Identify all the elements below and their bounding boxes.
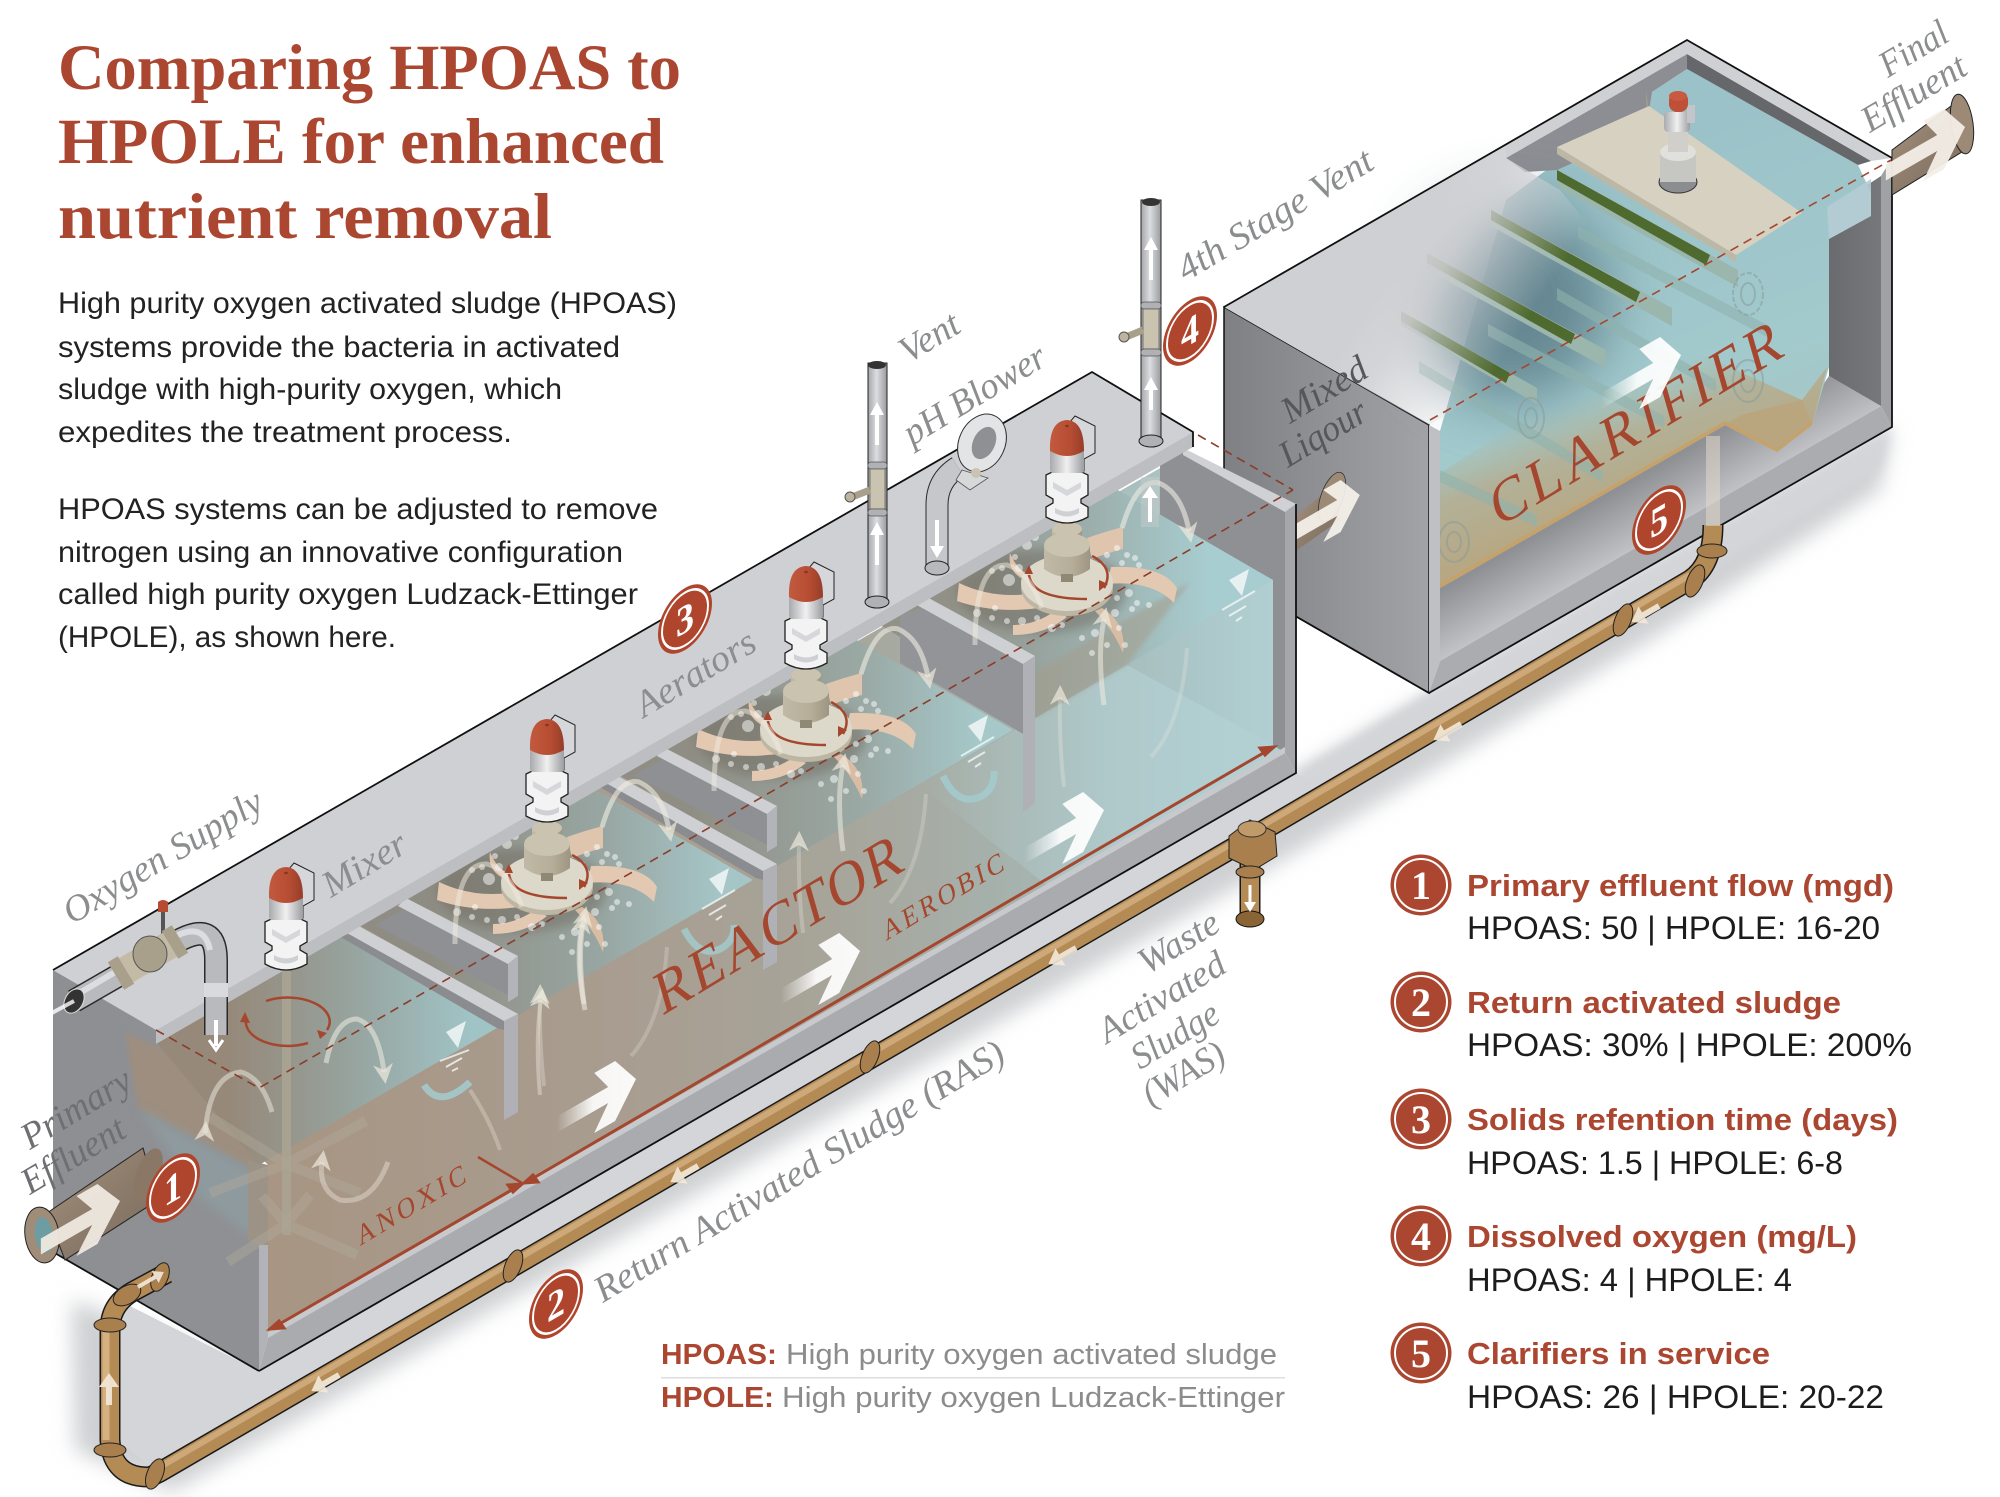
collar: aerator 1 xyxy=(524,820,570,881)
reactor left face xyxy=(53,970,259,1371)
intro paragraph 1 xyxy=(58,287,677,449)
water surface stage 2 xyxy=(359,789,753,1016)
dark water blob xyxy=(1410,200,1610,400)
intro paragraph 1: expedites the treatment process. xyxy=(58,416,512,449)
clarifier green skimmer bars xyxy=(1401,170,1738,404)
collar: aerator 2 xyxy=(783,667,829,728)
clarifier right rim xyxy=(1881,158,1892,427)
partition 2 lower wall xyxy=(598,775,777,970)
reactor interior base xyxy=(156,455,1285,1338)
stat 4: Dissolved oxygen (mg/L) xyxy=(1467,1219,1857,1254)
stat 1: HPOAS: 50 | HPOLE: 16-20 xyxy=(1467,910,1880,946)
pH blower xyxy=(925,406,1016,575)
legend of abbreviations xyxy=(661,1339,1285,1414)
label: effluent: Effluent xyxy=(13,1107,135,1203)
motor: aerator 3 xyxy=(1046,416,1095,523)
badge 3: 3 xyxy=(676,591,694,647)
water surface stage 1 xyxy=(156,936,497,1165)
oxygen supply pipe xyxy=(50,900,228,1050)
label: effluent 2: Effluent xyxy=(1853,45,1976,141)
aerobic label: AEROBIC xyxy=(879,846,1007,947)
dashed cutaway lines xyxy=(156,435,1293,1088)
label: liqour: Liqour xyxy=(1271,391,1375,476)
clarifier flow arrow xyxy=(1602,325,1681,430)
label: 4th stage vent: 4th Stage Vent xyxy=(1170,139,1382,290)
sludge bed xyxy=(1440,335,1827,588)
label: mixed: Mixed xyxy=(1273,348,1376,432)
badge 1: 1 xyxy=(164,1160,182,1216)
stat 5: Clarifiers in service xyxy=(1467,1336,1770,1371)
title xyxy=(58,32,681,253)
partition 1 lower wall xyxy=(339,925,518,1120)
clarifier bridge platform xyxy=(1557,90,1802,262)
collar: aerator 3 xyxy=(1044,521,1090,582)
reactor big flow arrows xyxy=(557,780,1104,1154)
stat 5 xyxy=(1390,1322,1884,1415)
clarifier outline xyxy=(1224,40,1892,693)
level pipe ghost in last stage xyxy=(1141,477,1159,527)
title: Comparing HPOAS to xyxy=(58,32,681,104)
stat 5: HPOAS: 26 | HPOLE: 20-22 xyxy=(1467,1379,1884,1415)
anoxic and aerobic dimension arrows xyxy=(270,747,1274,1329)
stat 5: 5 xyxy=(1411,1331,1431,1376)
stat 2: HPOAS: 30% | HPOLE: 200% xyxy=(1467,1027,1912,1063)
label: waste: Waste xyxy=(1131,902,1227,983)
near corner ghost block xyxy=(248,1160,268,1250)
mixer shaft and impellers xyxy=(210,970,366,1262)
intro paragraph 1: sludge with high-purity oxygen, which xyxy=(58,373,562,406)
stat 2: 2 xyxy=(1411,980,1431,1025)
deck lip xyxy=(156,432,1193,1044)
stat 4: HPOAS: 4 | HPOLE: 4 xyxy=(1467,1262,1792,1298)
legend of abbreviations: HPOLE: xyxy=(661,1382,774,1414)
reactor label: REACTOR xyxy=(647,818,910,1029)
stat 4: 4 xyxy=(1411,1214,1431,1259)
left rim xyxy=(259,1245,268,1371)
clarifier left rim xyxy=(1429,425,1440,693)
legend of abbreviations: HPOAS: xyxy=(661,1339,777,1371)
label: activated: Activated xyxy=(1088,943,1234,1053)
badge 2 xyxy=(529,1257,583,1351)
title: nutrient removal xyxy=(58,181,552,253)
clarifier label: CLARIFIER xyxy=(1483,303,1789,541)
floor edge highlight xyxy=(268,747,1285,1338)
stat 1: Primary effluent flow (mgd) xyxy=(1467,868,1894,903)
aerator rotor 1 xyxy=(437,826,657,955)
clarifier lower scraper bars xyxy=(1419,226,1769,527)
intro paragraph 2: HPOAS systems can be adjusted to remove xyxy=(58,493,658,526)
badge 4: 4 xyxy=(1181,303,1199,359)
clarifier rim xyxy=(1506,40,1892,161)
badge 4 xyxy=(1163,284,1217,378)
stat 2 xyxy=(1390,972,1912,1063)
clarifier water xyxy=(1440,69,1871,588)
stat 3: 3 xyxy=(1411,1097,1431,1142)
clarifier drive motor xyxy=(1659,91,1697,193)
partition 2 upper baffle xyxy=(634,748,777,852)
label: primary: Primary xyxy=(13,1059,140,1158)
clarifier floor xyxy=(1440,376,1881,661)
aerator rotor 3 xyxy=(957,527,1177,656)
stage 2 flows xyxy=(455,782,735,1086)
intro paragraph 2: (HPOLE), as shown here. xyxy=(58,621,396,654)
motor: aerator 1 xyxy=(526,715,575,822)
mixer rotation arrow heads xyxy=(240,1012,327,1039)
aerator rotor 2 xyxy=(696,673,916,802)
legend of abbreviations: High purity oxygen activated sludge xyxy=(786,1339,1277,1371)
motor: mixer xyxy=(265,863,314,970)
badge 5 xyxy=(1632,473,1686,567)
label: pH blower: pH Blower xyxy=(893,336,1054,455)
intro paragraph 2: nitrogen using an innovative configuration xyxy=(58,536,623,569)
final effluent pipe xyxy=(1886,93,1977,202)
clarifier tank xyxy=(1224,40,1892,693)
partition 1 upper baffle xyxy=(375,898,518,1002)
stat 3 xyxy=(1390,1088,1898,1181)
stat 4 xyxy=(1390,1206,1857,1298)
stat 3: Solids refention time (days) xyxy=(1467,1102,1898,1137)
right rim strip xyxy=(1285,504,1296,773)
stat 1 xyxy=(1390,854,1894,946)
clarifier dark back walls xyxy=(1506,54,1871,172)
reactor outline xyxy=(53,372,1296,1371)
mixed liquor pipe xyxy=(1286,469,1360,564)
badge 3 xyxy=(658,572,712,666)
partition 3 wall xyxy=(900,596,1035,812)
reactor tank xyxy=(53,372,1296,1371)
end rim top xyxy=(1183,448,1296,512)
stage 3 flows xyxy=(714,629,994,933)
4th stage vent pipe xyxy=(1119,198,1163,447)
label: sludge: Sludge xyxy=(1124,993,1227,1078)
clarifier gears xyxy=(1439,273,1763,562)
stat 3: HPOAS: 1.5 | HPOLE: 6-8 xyxy=(1467,1145,1843,1181)
label: oxygen supply: Oxygen Supply xyxy=(56,781,271,933)
label: vent: Vent xyxy=(892,303,969,372)
badge 5: 5 xyxy=(1650,492,1668,548)
floor stage 4 xyxy=(920,665,1285,888)
clarifier bottom rim xyxy=(1429,406,1892,693)
label: WAS: (WAS) xyxy=(1135,1033,1233,1115)
label: mixer: Mixer xyxy=(314,823,415,906)
label: final: Final xyxy=(1871,12,1956,86)
stat 2: Return activated sludge xyxy=(1467,985,1841,1020)
ground shadows xyxy=(72,427,1892,1492)
badge 1 xyxy=(146,1141,200,1235)
clarifier deck fading away xyxy=(1224,144,1650,425)
title: HPOLE for enhanced xyxy=(58,106,664,178)
end wall xyxy=(1160,452,1285,753)
intro paragraph 2 xyxy=(58,493,658,654)
back wall band xyxy=(1035,582,1190,718)
bottom rim xyxy=(259,753,1296,1371)
clarifier corner ghost xyxy=(1827,179,1871,239)
intro paragraph 1: systems provide the bacteria in activated xyxy=(58,331,620,364)
label: return activated sludge: Return Activated Sludge (RAS) xyxy=(586,1032,1012,1311)
intro paragraph 1: High purity oxygen activated sludge (HPOAS) xyxy=(58,287,677,320)
label: aerators: Aerators xyxy=(625,622,763,727)
anoxic ghost through wall xyxy=(125,1032,259,1172)
motor: aerator 2 xyxy=(785,562,834,669)
stat 1: 1 xyxy=(1411,863,1431,908)
intro paragraph 2: called high purity oxygen Ludzack-Ettinger xyxy=(58,578,638,611)
waste activated sludge tee xyxy=(1229,820,1277,927)
legend of abbreviations: High purity oxygen Ludzack-Ettinger xyxy=(782,1382,1285,1414)
primary effluent pipe xyxy=(21,1145,169,1276)
water surface stage 4 xyxy=(880,489,1273,718)
stage 1 flows xyxy=(205,925,585,1201)
badge 2: 2 xyxy=(547,1276,565,1332)
clarifier inner dark wall xyxy=(1829,176,1881,406)
anoxic label: ANOXIC xyxy=(353,1158,469,1252)
teal return swirls xyxy=(684,771,994,951)
water surface stage 3 xyxy=(619,639,1013,866)
vent pipe xyxy=(845,361,889,608)
stage 4 flows xyxy=(975,483,1255,787)
return activated sludge pipe xyxy=(94,525,1727,1492)
sludge down pipe from clarifier xyxy=(1706,436,1720,526)
reactor deck xyxy=(53,372,1193,1030)
